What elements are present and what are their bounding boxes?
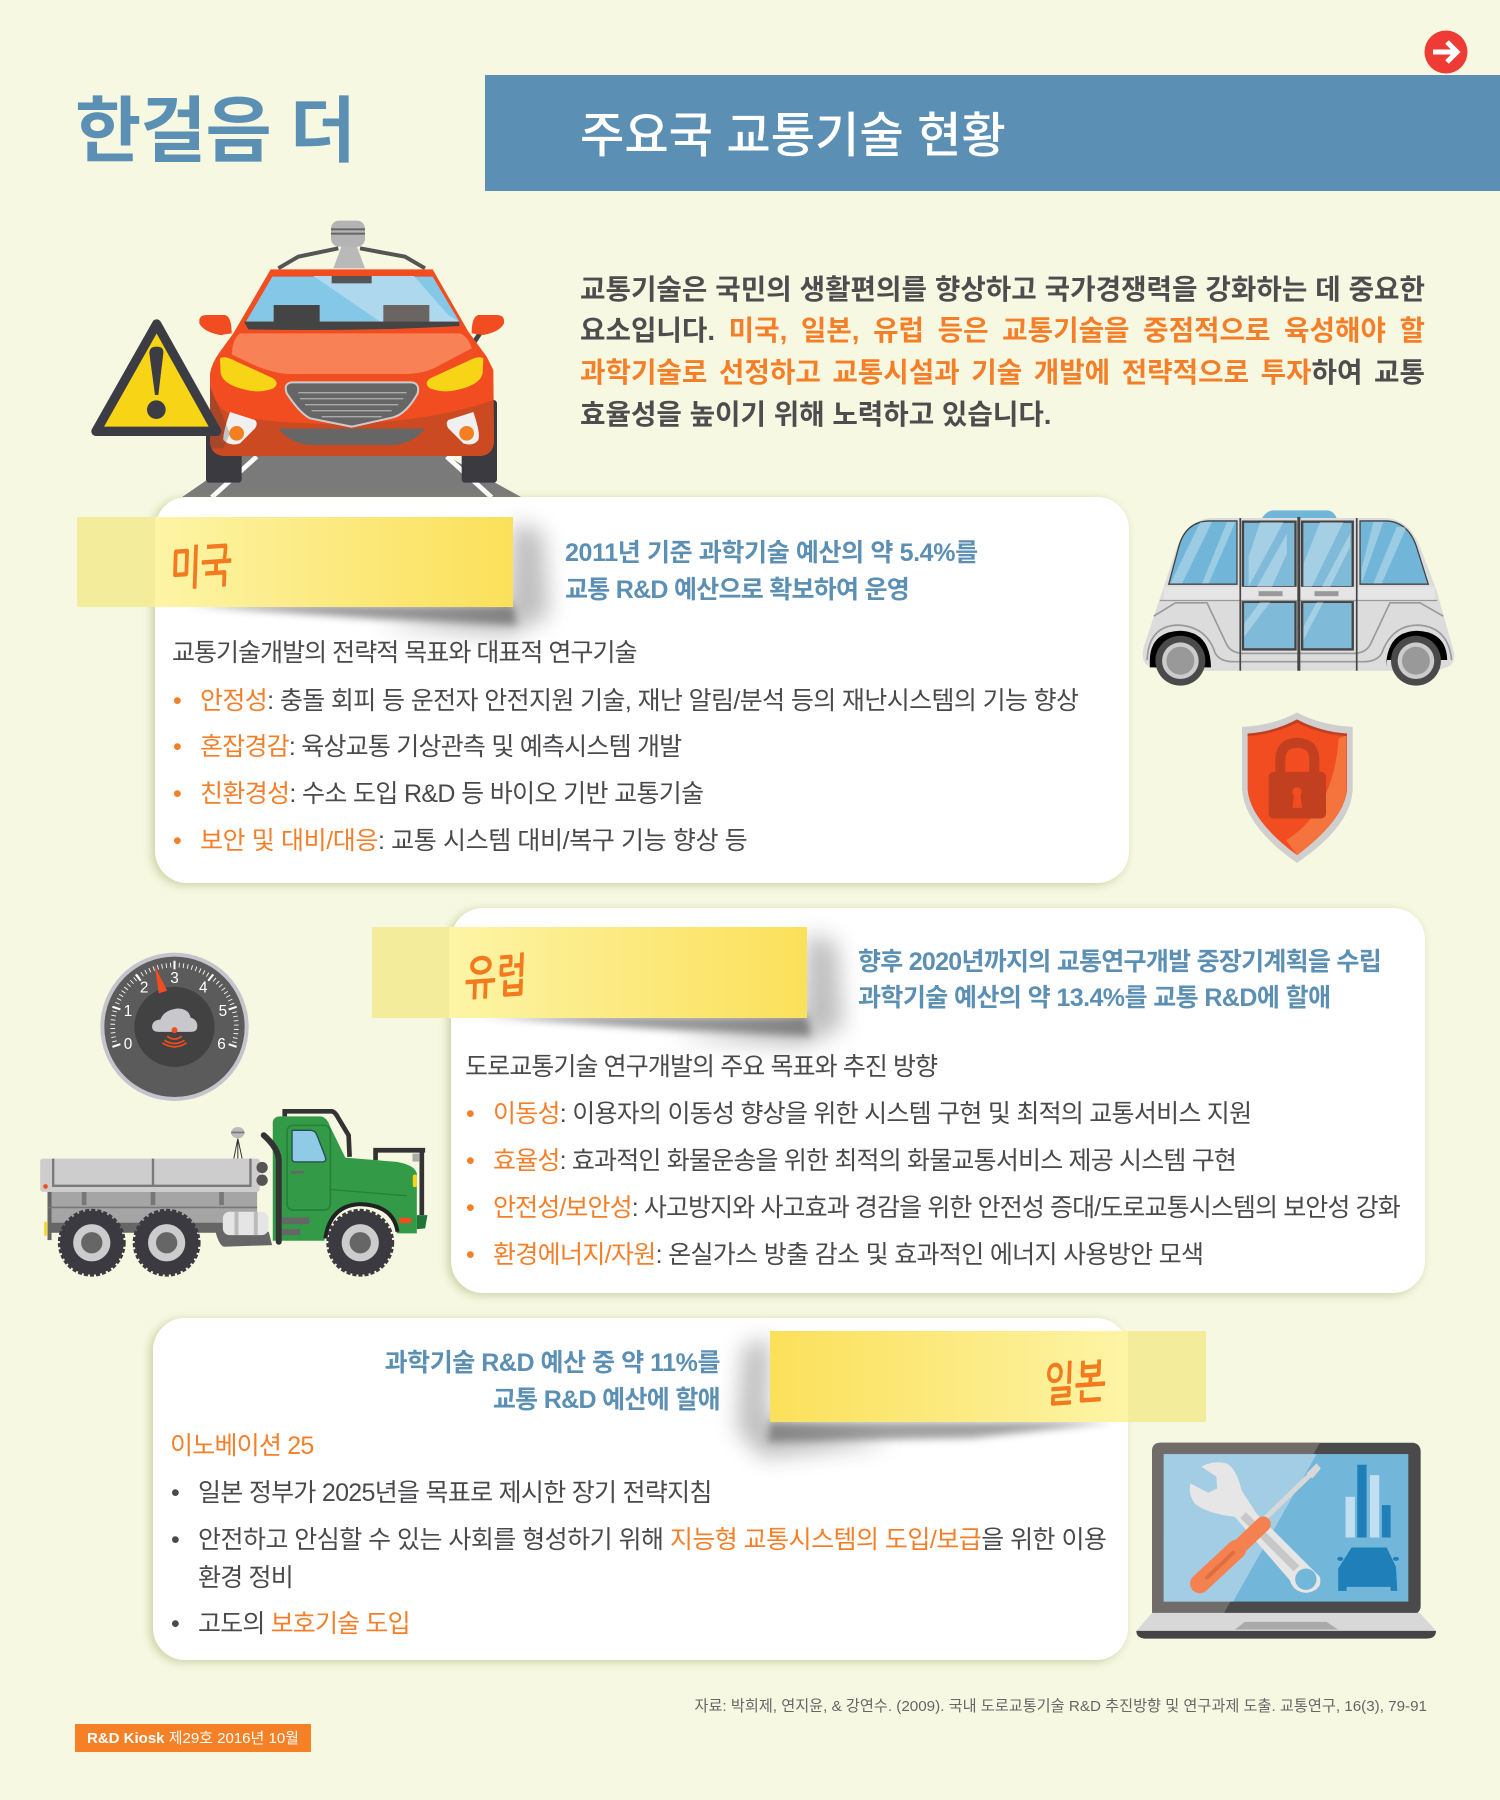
source note: 자료: 박희제, 연지윤, & 강연수. (2009). 국내 도로교통기술 R&D 추진방향 및 연구과제 도출. 교통연구, 16(3), 79-91 [694,1698,1427,1715]
Japan body text: 환경 정비 [198,1564,293,1592]
panel: Japan [145,1315,1206,1667]
USA body text: 보안 및 대비/대응: 교통 시스템 대비/복구 기능 향상 등 [200,827,747,855]
label: 유럽: 유럽 [464,952,528,1003]
sticky note: Japan [770,1331,1206,1422]
issue tag [75,1724,311,1752]
icon: speedometer gauge with cloud: 3 [170,970,179,987]
USA body text: • [173,687,181,715]
USA body text: 교통기술개발의 전략적 목표와 대표적 연구기술 [172,639,637,667]
intro paragraph: 교통기술은 국민의 생활편의를 향상하고 국가경쟁력을 강화하는 데 중요한 [580,274,1425,305]
USA body text: 친환경성: 수소 도입 R&D 등 바이오 기반 교통기술 [200,780,704,808]
header subtitle: 주요국 교통기술 현황 [580,109,1006,163]
Europe body text: 도로교통기술 연구개발의 주요 목표와 추진 방향 [465,1053,937,1081]
Europe body text: • [466,1194,474,1222]
label: 미국: 미국 [169,542,233,593]
USA body text: • [173,733,181,761]
Europe headline: 과학기술 예산의 약 13.4%를 교통 R&D에 할애 [858,984,1330,1012]
Europe body text: 이동성: 이용자의 이동성 향상을 위한 시스템 구현 및 최적의 교통서비스 지원 [493,1100,1251,1128]
panel: USA [77,494,1131,890]
icon: green autonomous truck [40,1109,428,1277]
Japan headline [385,1349,720,1414]
sticky note: Europe [372,927,807,1018]
Japan body text: 안전하고 안심할 수 있는 사회를 형성하기 위해 지능형 교통시스템의 도입/보급을 위한 이용 [198,1526,1106,1554]
icon: autonomous shuttle [1142,510,1454,686]
USA headline: 2011년 기준 과학기술 예산의 약 5.4%를 [565,539,978,567]
header band [485,75,1500,191]
Europe body text: 환경에너지/자원: 온실가스 방출 감소 및 효과적인 에너지 사용방안 모색 [493,1241,1203,1269]
USA body text: • [173,780,181,808]
arrow button [1424,30,1468,74]
Europe headline [858,948,1381,1012]
Europe body text: 안전성/보안성: 사고방지와 사고효과 경감을 위한 안전성 증대/도로교통시스템의 보안성 강화 [493,1194,1400,1222]
Europe body text: 효율성: 효과적인 화물운송을 위한 최적의 화물교통서비스 제공 시스템 구현 [493,1147,1236,1175]
Japan headline: 과학기술 R&D 예산 중 약 11%를 [385,1349,720,1377]
Europe body text: • [466,1100,474,1128]
icon: speedometer gauge with cloud: 5 [219,1003,227,1020]
icon: speedometer gauge with cloud: 4 [199,979,208,996]
USA headline: 교통 R&D 예산으로 확보하여 운영 [565,576,909,604]
icon: autonomous car with warning sign [91,220,521,498]
Japan body text: • [171,1526,179,1554]
USA headline [565,539,978,604]
intro paragraph: 요소입니다. 미국, 일본, 유럽 등은 교통기술을 중점적으로 육성해야 할 [580,315,1425,346]
intro paragraph [580,274,1425,430]
icon: laptop with tools and chart [1136,1442,1436,1639]
issue tag: R&D Kiosk 제29호 2016년 10월 [87,1730,299,1747]
icon: speedometer gauge with cloud: 1 [124,1003,132,1020]
intro paragraph: 효율성을 높이기 위해 노력하고 있습니다. [580,399,1052,430]
Japan body text [170,1432,1106,1638]
Japan body text: 고도의 보호기술 도입 [198,1610,410,1638]
Europe body text: • [466,1241,474,1269]
USA body text: 안정성: 충돌 회피 등 운전자 안전지원 기술, 재난 알림/분석 등의 재난시스템의 기능 향상 [200,687,1078,715]
Japan body text: 이노베이션 25 [170,1432,314,1460]
USA body text [172,639,1078,855]
sticky note: USA [77,517,513,607]
label: 일본: 일본 [1043,1358,1107,1409]
Japan body text: • [171,1610,179,1638]
icon: speedometer gauge with cloud [100,952,249,1101]
Europe body text: • [466,1147,474,1175]
USA body text: 혼잡경감: 육상교통 기상관측 및 예측시스템 개발 [200,733,681,761]
icon: speedometer gauge with cloud: 2 [140,979,148,996]
Europe body text [465,1053,1400,1269]
panel: Europe [372,905,1427,1300]
icon: speedometer gauge with cloud: 0 [124,1036,132,1053]
title: 한걸음 더 [75,92,355,172]
Europe headline: 향후 2020년까지의 교통연구개발 중장기계획을 수립 [858,948,1381,976]
USA body text: • [173,827,181,855]
Japan body text: • [171,1479,179,1507]
Japan body text: 일본 정부가 2025년을 목표로 제시한 장기 전략지침 [198,1479,712,1507]
Japan headline: 교통 R&D 예산에 할애 [493,1386,720,1414]
icon: speedometer gauge with cloud: 6 [217,1036,226,1053]
icon: security shield [1242,712,1353,863]
intro paragraph: 과학기술로 선정하고 교통시설과 기술 개발에 전략적으로 투자하여 교통 [580,357,1425,388]
